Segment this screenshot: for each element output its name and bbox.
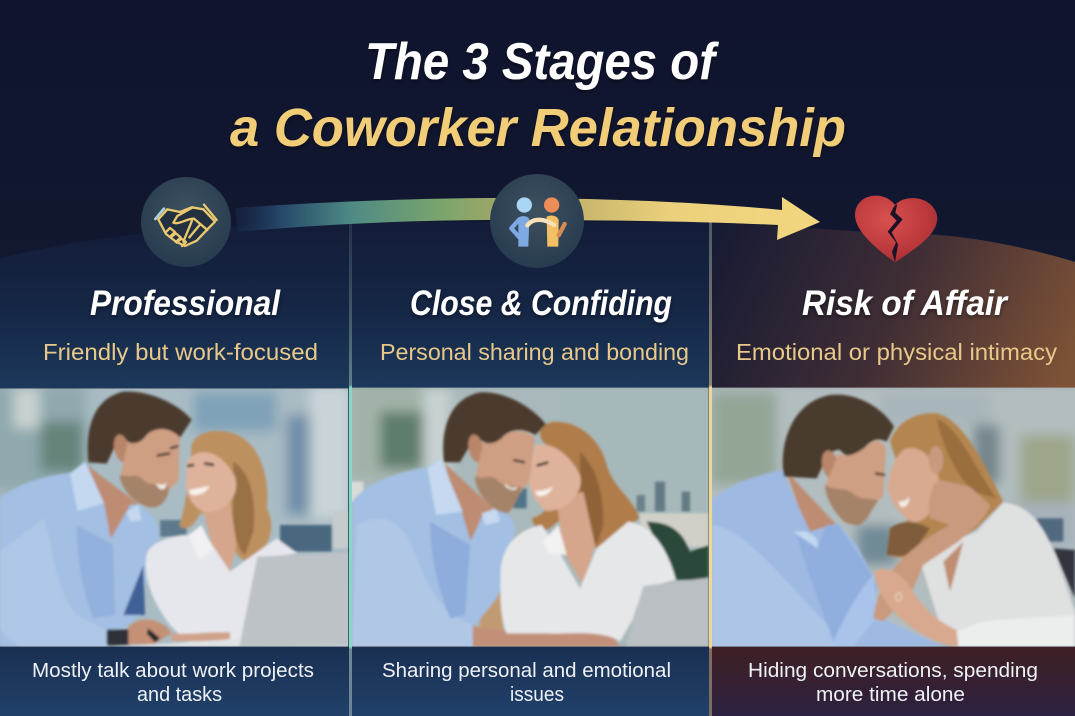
subheading: risk of affair: Emotional or physical intimacy — [736, 339, 1058, 365]
caption: risk of affair: more time alone — [816, 684, 965, 706]
title — [230, 33, 846, 158]
bottom strip: risk of affair — [711, 647, 1075, 716]
photo: colleagues leaning foreheads together — [352, 388, 709, 647]
caption: professional: Mostly talk about work projects — [32, 660, 314, 682]
panel header background: close and confiding — [351, 222, 710, 388]
caption: close and confiding: issues — [510, 684, 564, 706]
panel header background: risk of affair — [711, 222, 1075, 388]
caption: professional: and tasks — [137, 684, 222, 706]
subheading: close and confiding: Personal sharing and bonding — [380, 339, 689, 365]
caption: risk of affair — [748, 660, 1038, 706]
divider: stage 2 to 3 — [709, 222, 712, 716]
icon: two people with arm around shoulder — [490, 174, 584, 268]
icon: handshake — [141, 177, 231, 267]
caption: close and confiding: Sharing personal and emotional — [382, 660, 671, 682]
photo: colleagues in an intimate embrace — [712, 388, 1075, 647]
caption: risk of affair: Hiding conversations, spending — [748, 660, 1038, 682]
panel: close and confiding — [337, 222, 723, 716]
subheading: professional: Friendly but work-focused — [43, 339, 318, 365]
caption: close and confiding — [382, 660, 671, 706]
icon: broken heart — [855, 196, 937, 262]
bottom strip: close and confiding — [351, 647, 710, 716]
panel: risk of affair — [697, 222, 1075, 716]
divider: stage 1 to 2 — [349, 222, 352, 716]
arrow: progression through stages — [235, 197, 820, 240]
photo: colleagues looking at each other — [0, 378, 360, 655]
heading: professional: Professional — [90, 284, 281, 323]
bottom strip: professional — [0, 647, 349, 716]
title: a Coworker Relationship — [230, 98, 846, 158]
panel header background: professional — [0, 222, 350, 388]
heading: risk of affair: Risk of Affair — [802, 284, 1009, 323]
caption: professional — [32, 660, 314, 706]
heading: close and confiding: Close & Confiding — [410, 284, 672, 323]
title: The 3 Stages of — [365, 33, 719, 91]
panel: professional — [0, 222, 360, 716]
